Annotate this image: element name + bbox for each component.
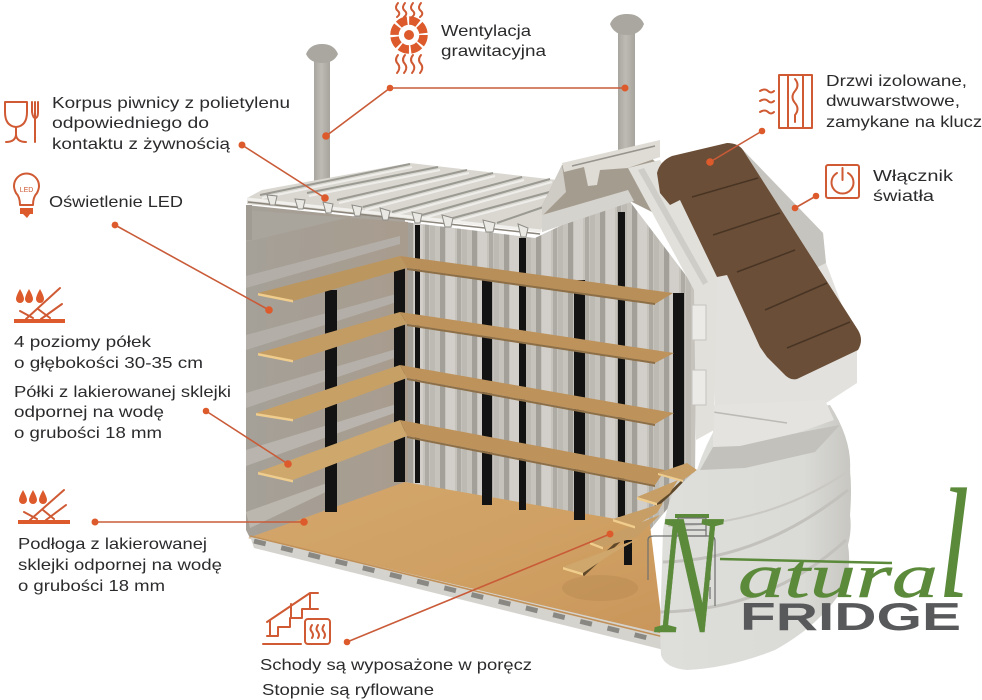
text: ventilation [441,23,546,60]
callout: door [706,128,765,166]
corrugated roof [247,163,559,237]
icon: LED bulb: LED [20,187,33,194]
text: shelf plywood: o grubości 18 mm [14,425,162,442]
text: floor: Podłoga z lakierowanej [18,536,207,553]
text: shelf plywood: odpornej na wodę [14,404,164,421]
icon: jar in logo [648,514,715,606]
text: LED lighting: Oświetlenie LED [49,194,183,211]
icon: insulated door [760,75,812,128]
text: light switch: światła [873,188,934,205]
upper tank block [640,150,857,447]
callout: LED [112,222,273,314]
callout: light switch [792,193,819,211]
text: stairs: Stopnie są ryflowane [262,682,434,699]
callout: ventilation [322,84,628,140]
callout: food-grade body [238,142,329,202]
text: ventilation: Wentylacja [441,23,531,40]
icon: LED bulb [14,173,39,218]
logo script: Natural: N [654,480,724,670]
icon: stairs with anti-slip [263,593,330,644]
vent pipes [306,14,644,190]
text: door: Drzwi izolowane, [826,73,967,90]
shelves [256,256,674,487]
floor shadow [562,575,638,601]
text: door: dwuwarstwowe, [826,93,960,110]
icon: water resistant floor [18,490,70,524]
back wall with vertical ribs [405,195,697,530]
cellar illustration [246,14,861,670]
text: food safe body: kontaktu z żywnością [52,136,230,153]
text: shelf levels: o głębokości 30-35 cm [14,355,203,372]
text: door: zamykane na klucz [826,114,982,131]
insulated door, brown [657,143,861,379]
stair treads [563,463,697,576]
callout: stairs [344,530,614,645]
text: light switch [873,168,954,205]
shelf level 1 [258,256,673,305]
text: shelf levels [14,334,203,372]
text: shelf levels: 4 poziomy półek [14,334,152,351]
text: stairs [260,657,532,699]
text: door [826,73,982,131]
text: floor: o grubości 18 mm [18,578,165,595]
black posts [325,212,684,520]
logo script: Natural: atura [738,543,938,611]
left pipe [306,44,338,190]
raised roof section [542,140,660,232]
text: stairs: Schody są wyposażone w poręcz [260,657,532,674]
logo: Natural Fridge [648,456,970,670]
text: shelf plywood [14,384,231,442]
white door frame [628,160,717,440]
right pipe [610,14,644,152]
shelf level 2 [258,312,674,364]
logo script: Natural: l [938,456,970,631]
text: food safe body: Korpus piwnicy z polietylenu [52,95,290,112]
icon: power switch [826,165,859,198]
text: food safe body [52,95,290,153]
logo script: Natural [654,456,970,670]
shelf level 4 [258,420,665,487]
text: light switch: Włącznik [873,168,954,185]
icon: ventilation fan [394,3,424,73]
floor [248,482,664,640]
text: floor: sklejki odpornej na wodę [18,557,222,574]
callout: floor [92,518,308,526]
left wall [246,204,408,538]
text: floor [18,536,222,595]
corrugated floor base [250,536,664,650]
text: ventilation: grawitacyjna [441,43,546,60]
callout: plywood shelves [203,408,292,468]
shelf level 3 [256,365,674,426]
icon: food safe glass and fork [5,102,38,142]
text: food safe body: odpowiedniego do [52,115,209,132]
text: shelf plywood: Półki z lakierowanej sklejki [14,384,231,401]
logo word: FRIDGE: FRIDGE [740,596,961,639]
callout lines [92,84,819,645]
icon: water resistant shelf [14,288,65,323]
lower tank drum [660,405,851,670]
